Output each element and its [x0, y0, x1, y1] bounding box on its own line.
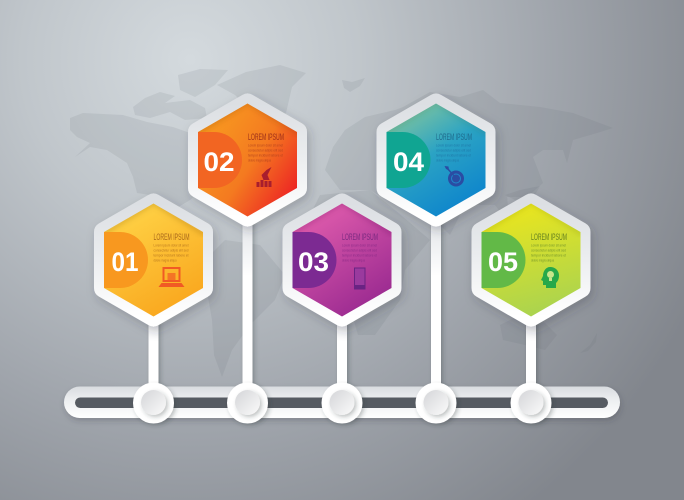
world map [70, 65, 613, 377]
body text 01 [154, 244, 188, 262]
body text 02: consectetur adipis elit sed [248, 148, 283, 152]
number 03: 03 [298, 247, 329, 277]
heading 05: LOREM IPSUM [531, 232, 567, 242]
icon: computer monitor [158, 267, 184, 287]
body text 01: dolore magna aliqua [154, 258, 176, 262]
body text 04 [436, 144, 471, 162]
body text 03 [342, 244, 377, 262]
number tab 01 [104, 232, 148, 288]
greenland [217, 65, 306, 125]
heading 03: LOREM IPSUM [342, 232, 378, 242]
panel: step 01 [102, 202, 206, 316]
body text 02: tempor incidunt labore et [248, 154, 283, 158]
body text 04: tempor incidunt labore et [436, 154, 471, 158]
body text 05 [531, 244, 566, 262]
number 05: 05 [488, 247, 518, 277]
body text 03: dolore magna aliqua [342, 258, 365, 262]
south america [205, 240, 285, 377]
body text 03: Lorem ipsum dolor sit amet [342, 244, 377, 248]
indonesia [505, 186, 540, 200]
heading 04: LOREM IPSUM [436, 132, 472, 142]
icon: head with lightbulb [541, 267, 559, 288]
connector stems [148, 215, 536, 390]
eurasia [325, 90, 613, 235]
body text 02: Lorem ipsum dolor sit amet [248, 144, 283, 148]
number 02: 02 [204, 147, 234, 177]
icon: smartphone [354, 268, 365, 289]
panel: step 04 [384, 102, 488, 216]
node 1 [133, 382, 174, 424]
number 01: 01 [112, 247, 138, 277]
node 3 [322, 382, 362, 424]
canadian arctic islands [133, 69, 228, 120]
timeline track [64, 386, 620, 418]
body text 01: consectetur adipis elit sed [154, 248, 188, 252]
body text 05: tempor incidunt labore et [531, 254, 566, 258]
svalbard [342, 78, 365, 92]
heading 02: LOREM IPSUM [248, 132, 284, 142]
new zealand [580, 333, 597, 353]
body text 05: Lorem ipsum dolor sit amet [531, 244, 566, 248]
panel: step 05 [479, 202, 583, 316]
number tab 02 [198, 132, 242, 188]
number tab 03 [292, 232, 336, 288]
body text 04: dolore magna aliqua [436, 158, 459, 162]
timeline nodes [133, 382, 552, 424]
node 5 [510, 382, 552, 424]
number tab 04 [386, 132, 430, 188]
body text 03: tempor incidunt labore et [342, 254, 377, 258]
north america [70, 113, 215, 215]
icon: hand on bar chart [256, 167, 272, 187]
number 04: 04 [393, 147, 424, 177]
body text 01: Lorem ipsum dolor sit amet [154, 244, 188, 248]
node 4 [416, 382, 456, 424]
body text 05: dolore magna aliqua [531, 258, 554, 262]
heading 01: LOREM IPSUM [154, 232, 190, 242]
number tab 05 [482, 232, 526, 288]
body text 05: consectetur adipis elit sed [531, 248, 566, 252]
body text 02: dolore magna aliqua [248, 158, 271, 162]
africa [300, 190, 430, 335]
panel: step 03 [290, 202, 394, 316]
australia [500, 315, 557, 350]
icon: dartboard target [444, 166, 464, 186]
body text 03: consectetur adipis elit sed [342, 248, 377, 252]
panel: step 02 [196, 102, 300, 216]
body text 04: consectetur adipis elit sed [436, 148, 471, 152]
node 2 [227, 382, 268, 424]
body text 04: Lorem ipsum dolor sit amet [436, 144, 471, 148]
body text 01: tempor incidunt labore et [154, 254, 188, 258]
body text 02 [248, 144, 283, 162]
